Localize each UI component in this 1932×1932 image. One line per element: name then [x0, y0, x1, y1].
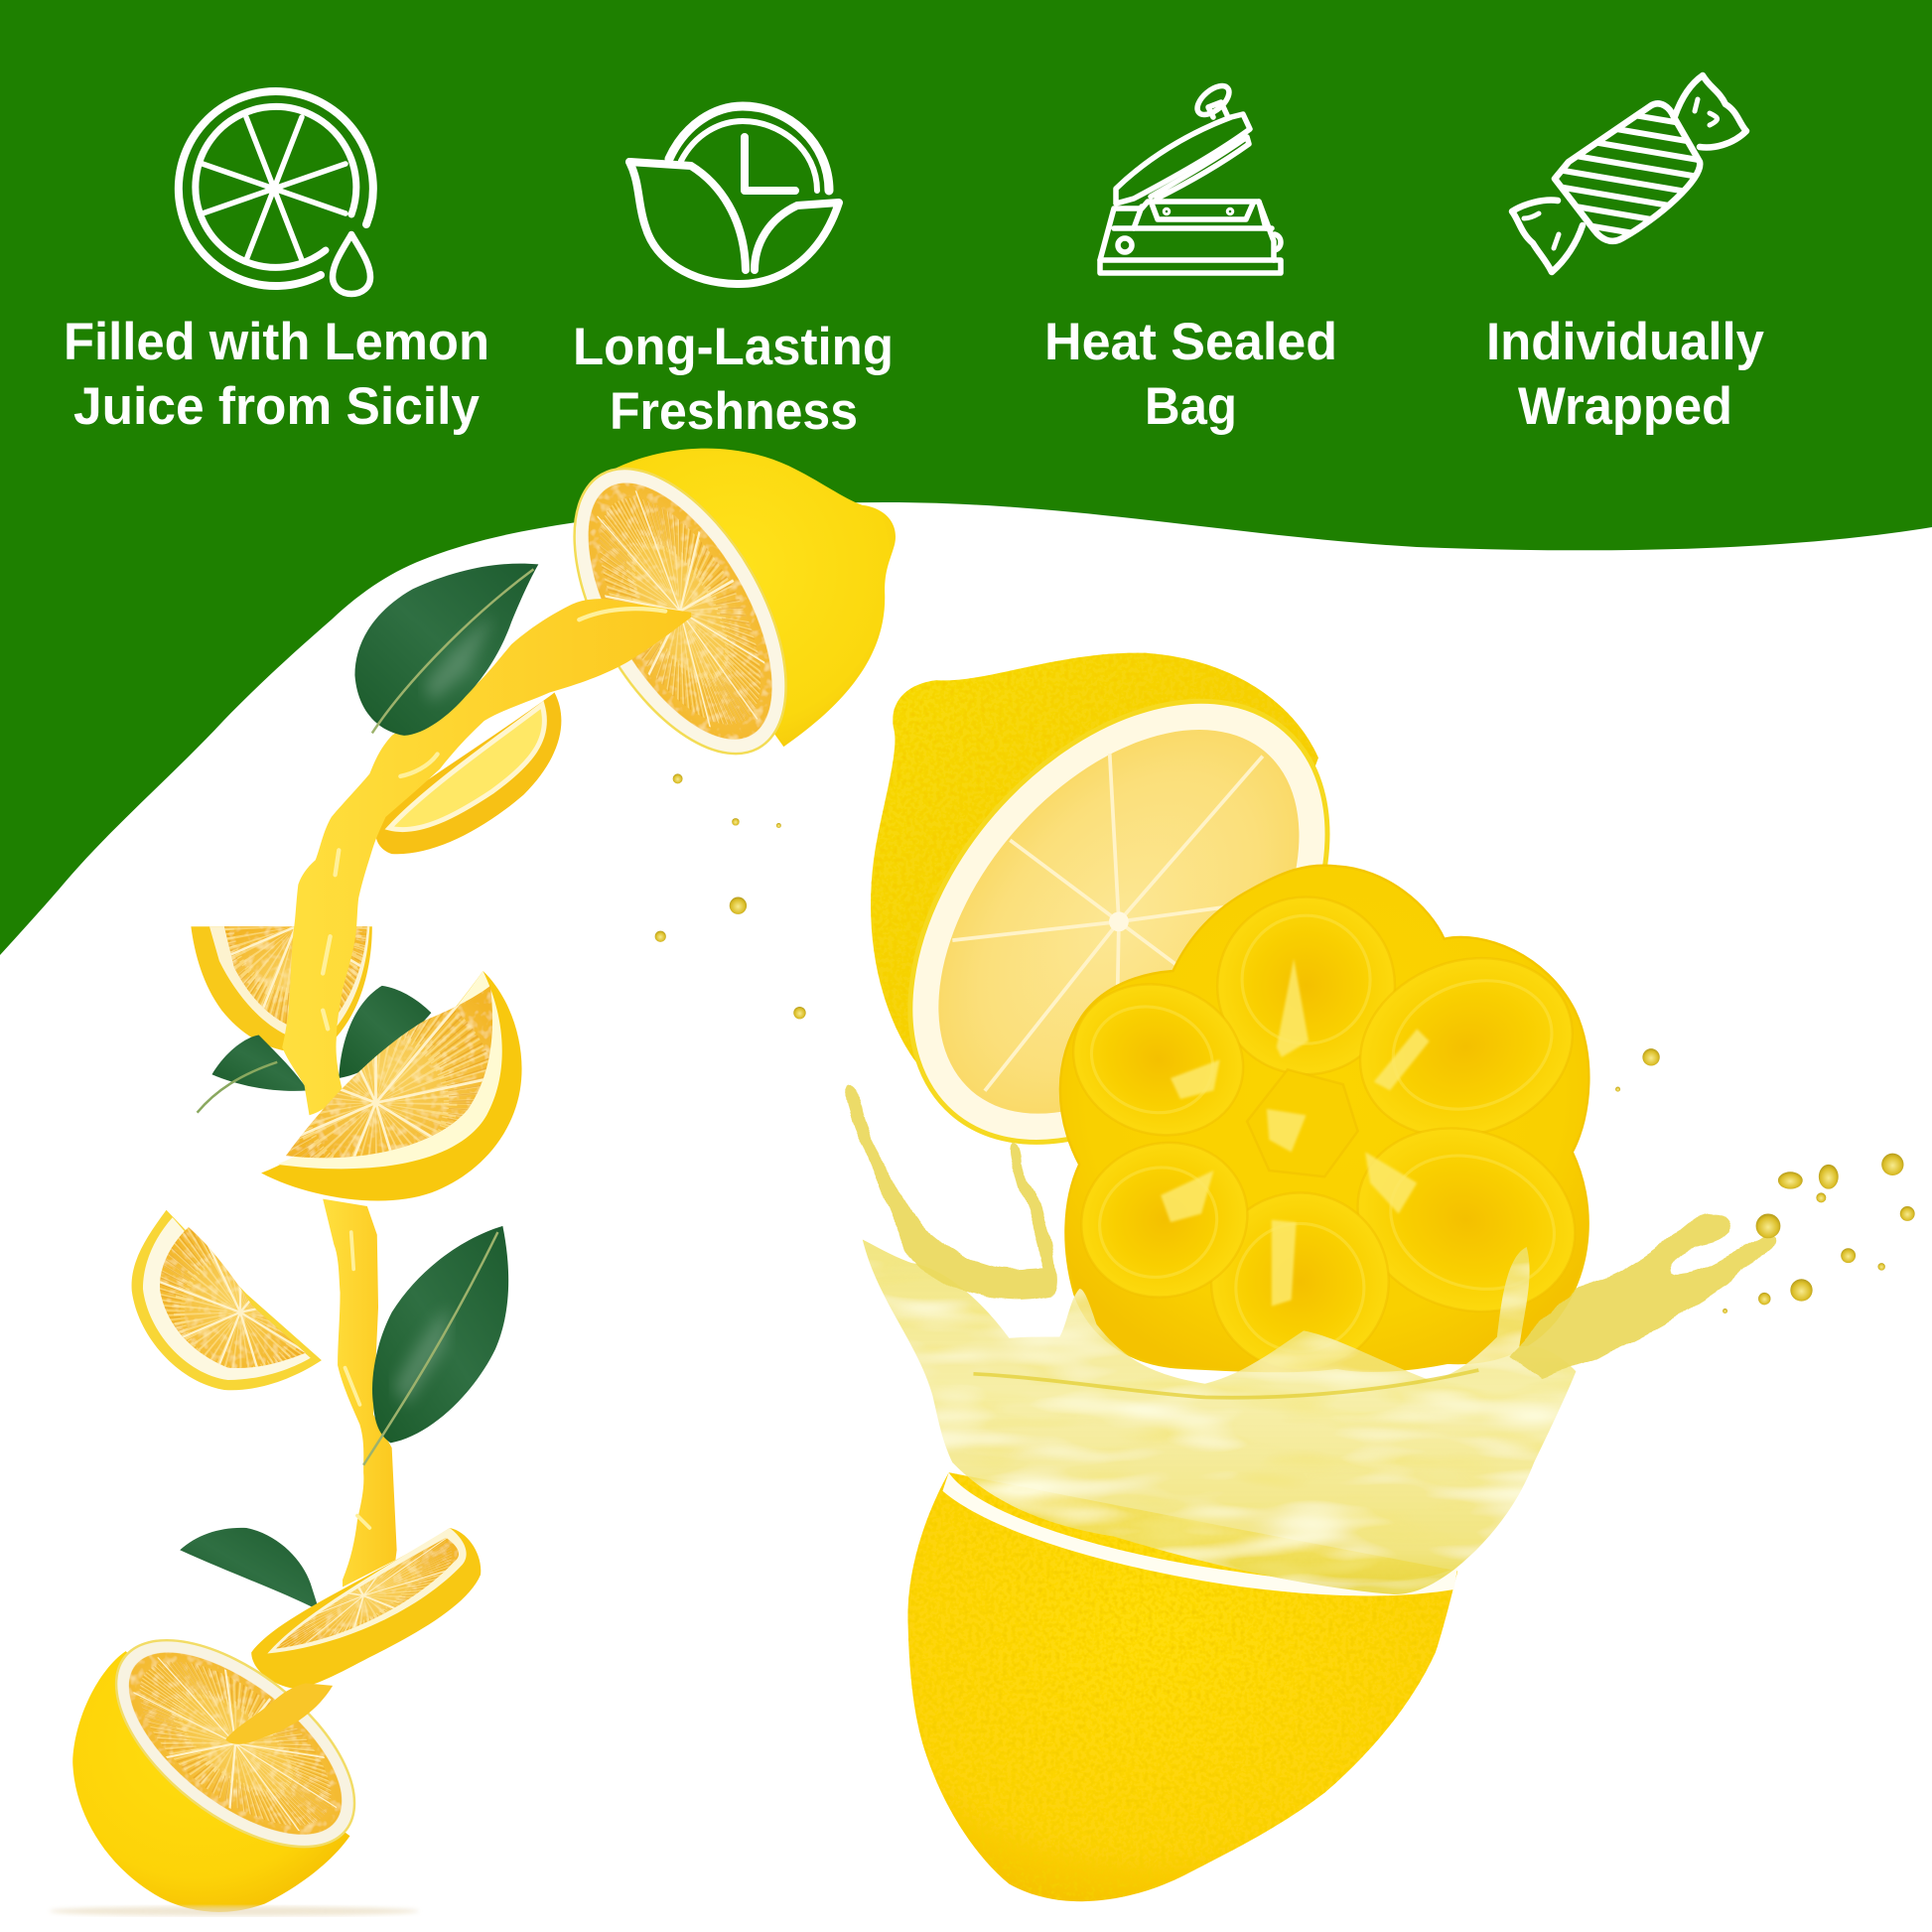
splash spray right: [1509, 1212, 1775, 1378]
candy petals: [1052, 897, 1600, 1370]
label: individually wrapped: Wrapped: [1518, 377, 1732, 436]
hero: lemon half upper: [827, 621, 1411, 1222]
label: long-lasting freshness: Freshness: [610, 382, 858, 441]
label: heat sealed bag: Heat Sealed: [1044, 313, 1337, 371]
feature: wrapped: [1486, 75, 1764, 436]
half wedge behind stream: [191, 926, 372, 1050]
lemon half pouring juice: [531, 434, 896, 788]
leaf top: [354, 564, 538, 736]
feature: heat sealed: [1044, 80, 1337, 436]
feature: freshness: [573, 106, 894, 441]
label: long-lasting freshness: Long-Lasting: [573, 318, 894, 376]
hero: lemon candy: [1052, 866, 1600, 1371]
label: long-lasting freshness: [573, 318, 894, 441]
cut face: [827, 621, 1411, 1222]
label: heat sealed bag: [1044, 313, 1337, 436]
label: filled with lemon juice: [64, 313, 489, 436]
leaf right: [363, 1226, 508, 1465]
splash tendrils: [845, 1084, 1775, 1378]
label: filled with lemon juice: Filled with Lemon: [64, 313, 489, 371]
label: filled with lemon juice: Juice from Sicily: [73, 377, 481, 436]
candy highlights: [1161, 959, 1430, 1307]
juice droplets left: [655, 773, 806, 1019]
left wedge: [131, 1209, 322, 1390]
label: heat sealed bag: Bag: [1145, 377, 1237, 436]
icon: wrapped candy: [1512, 75, 1746, 272]
leaf pair behind wedge: [198, 986, 431, 1113]
hero: juice splash crown: [845, 1084, 1775, 1594]
leaf lower: [180, 1528, 319, 1610]
label: individually wrapped: [1486, 313, 1764, 436]
hero: lemon half lower: [907, 1472, 1457, 1901]
green wave header: [0, 0, 1932, 955]
juice stream lower: [225, 1683, 333, 1744]
juice stream middle: [323, 1199, 397, 1587]
juice stream top: [282, 599, 691, 1115]
lemon half bottom: [72, 1600, 390, 1912]
juice droplets right: [1615, 1048, 1915, 1313]
falling lemons and juice column: [50, 434, 896, 1916]
splash tendril left: [845, 1084, 1056, 1300]
ground shadow: [50, 1906, 419, 1916]
feature: lemon juice: [64, 91, 489, 436]
slice behind juice: [375, 692, 561, 854]
large wedge: [261, 971, 522, 1201]
candy petal inner rings: [1076, 915, 1573, 1351]
illustration: lemons, juice and candy: [50, 434, 1915, 1916]
icon: lemon slice with drop: [179, 91, 373, 294]
flat slice: [251, 1528, 481, 1688]
icon: heat sealer machine: [1100, 80, 1281, 273]
icon: clock with leaves: [629, 106, 839, 284]
label: individually wrapped: Individually: [1486, 313, 1764, 371]
